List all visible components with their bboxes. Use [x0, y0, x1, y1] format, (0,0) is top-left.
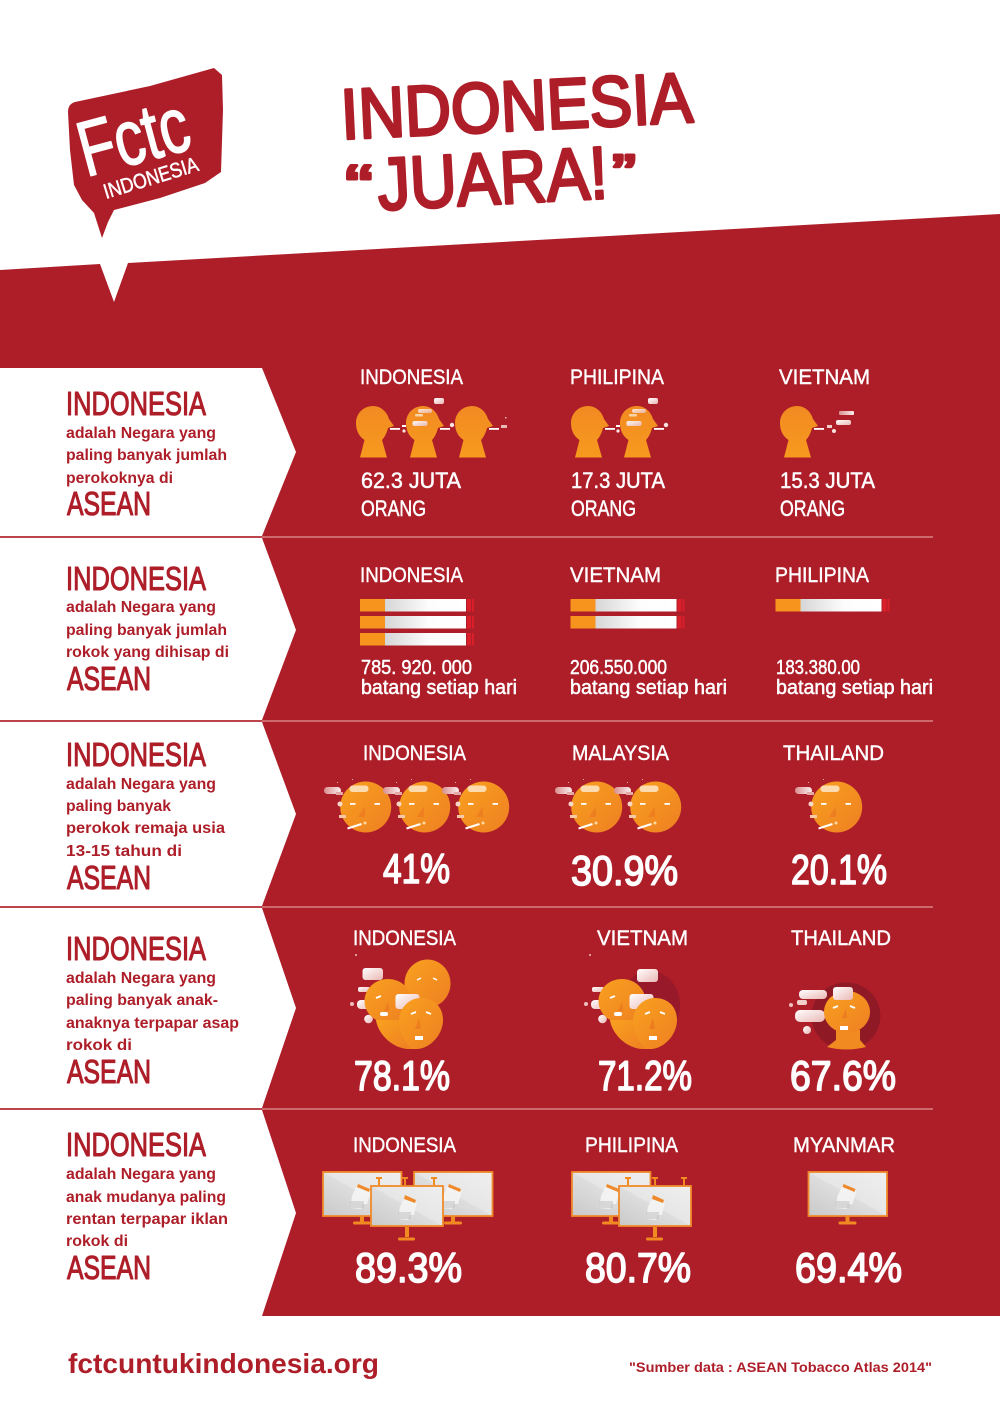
stat: Thailand teen smokers: 20.1% — [791, 846, 887, 893]
stat: Vietnam 15.3 juta: ORANG — [780, 496, 845, 521]
footer: data source: "Sumber data : ASEAN Tobacco Atlas 2014" — [629, 1359, 932, 1375]
heading: Indonesia: INDONESIA — [66, 736, 206, 773]
heading: ASEAN: ASEAN — [67, 660, 151, 697]
stat: Philipina ads: 80.7% — [585, 1244, 691, 1291]
stat: Vietnam cigarettes: batang setiap hari — [570, 677, 727, 699]
stat: Malaysia teen smokers — [555, 742, 681, 894]
text block: description: perokoknya di — [66, 470, 173, 487]
icon: two cigarettes — [570, 599, 684, 628]
stat: Indonesia teen smokers — [324, 742, 509, 892]
text block: description — [66, 599, 229, 661]
text block: description: 13-15 tahun di — [66, 843, 182, 860]
title: “ — [345, 153, 373, 220]
text block: description: adalah Negara yang — [66, 425, 216, 442]
red background band — [0, 214, 1000, 1316]
text block: description — [66, 1166, 228, 1250]
title: ” — [612, 145, 636, 203]
stat: Indonesia ads: 89.3% — [355, 1244, 462, 1291]
icon: one billboard — [808, 1172, 887, 1224]
stat: Indonesia 62.3 juta — [356, 366, 507, 521]
text block: description: adalah Negara yang — [66, 1166, 216, 1183]
stat: Indonesia children — [350, 927, 456, 1099]
stat: Myanmar ads: 69.4% — [795, 1244, 902, 1291]
stat: Indonesia 62.3 juta: 62.3 JUTA — [361, 468, 461, 493]
stat: Malaysia teen smokers: MALAYSIA — [572, 742, 669, 765]
text block: description: rokok di — [66, 1037, 132, 1054]
text block: description: rentan terpapar iklan — [66, 1211, 228, 1228]
icon: three children heads with smoke — [350, 954, 450, 1049]
stat: Indonesia ads: INDONESIA — [353, 1134, 456, 1157]
panel: smokers count — [0, 368, 296, 536]
icon: one smoking head — [780, 406, 854, 458]
stat: Indonesia cigarettes: 785. 920. 000 — [361, 657, 472, 679]
icon: one cigarette — [776, 599, 890, 612]
heading: ASEAN: ASEAN — [67, 859, 151, 896]
panel: youth exposed to ads — [0, 1110, 296, 1316]
text block: description — [66, 776, 225, 860]
stat: Thailand teen smokers: THAILAND — [783, 742, 884, 765]
icon: three smoking heads — [356, 398, 507, 458]
stat: Thailand children — [789, 927, 896, 1099]
icon: two teen faces — [555, 779, 681, 832]
text block: description: paling banyak anak- — [66, 992, 218, 1009]
panel: children exposed to smoke — [0, 908, 296, 1108]
stat: Indonesia ads — [323, 1134, 492, 1291]
text block: description: rokok yang dihisap di — [66, 644, 229, 661]
stat: Philipina 17.3 juta: ORANG — [571, 496, 636, 521]
stat: Philipina ads — [572, 1134, 691, 1291]
text block: description: paling banyak jumlah — [66, 447, 227, 464]
heading: ASEAN: ASEAN — [67, 1249, 151, 1286]
stat: Indonesia 62.3 juta: ORANG — [361, 496, 426, 521]
stat: Indonesia teen smokers: 41% — [383, 845, 450, 892]
text block: description: adalah Negara yang — [66, 970, 216, 987]
icon: three cigarettes — [360, 599, 474, 646]
stat: Vietnam children: 71.2% — [598, 1052, 692, 1099]
stat: Vietnam cigarettes — [570, 564, 727, 699]
stat: Vietnam 15.3 juta: VIETNAM — [779, 366, 870, 389]
heading: Indonesia: INDONESIA — [66, 560, 206, 597]
icon: two smoking heads — [571, 398, 668, 458]
logo: FCTC Indonesia speech bubble: INDONESIA — [101, 153, 201, 204]
stat: Thailand children: THAILAND — [791, 927, 891, 950]
stat: Vietnam 15.3 juta: 15.3 JUTA — [780, 468, 875, 493]
title — [339, 59, 695, 226]
logo: FCTC Indonesia speech bubble: Fctc — [68, 79, 199, 193]
stat: Vietnam children: VIETNAM — [597, 927, 688, 950]
footer: website: fctcuntukindonesia.org — [68, 1348, 379, 1379]
heading: Indonesia: INDONESIA — [66, 1126, 206, 1163]
icon: one child head with smoke — [789, 982, 880, 1050]
stat: Indonesia teen smokers: INDONESIA — [363, 742, 466, 765]
stat: Indonesia children: INDONESIA — [353, 927, 456, 950]
text block: description — [66, 425, 227, 487]
stat: Myanmar ads: MYANMAR — [793, 1134, 895, 1157]
icon: one teen face — [795, 779, 862, 832]
stat: Indonesia cigarettes — [360, 564, 517, 699]
panel: teen smokers — [0, 722, 296, 906]
text block: description — [66, 970, 239, 1054]
stat: Philipina cigarettes — [775, 564, 933, 699]
icon: two billboards — [572, 1172, 691, 1240]
title: INDONESIA — [339, 59, 695, 155]
text block: description: adalah Negara yang — [66, 599, 216, 616]
text block: description: anaknya terpapar asap — [66, 1015, 239, 1032]
icon: two children heads with smoke — [584, 954, 680, 1049]
title: JUARA! — [375, 131, 610, 226]
stat: Malaysia teen smokers: 30.9% — [571, 847, 678, 894]
stat: Philipina 17.3 juta — [570, 366, 668, 521]
heading: Indonesia: INDONESIA — [66, 385, 206, 422]
text block: description: perokok remaja usia — [66, 820, 225, 837]
stat: Thailand children: 67.6% — [790, 1052, 896, 1099]
stat: Myanmar ads — [793, 1134, 902, 1291]
icon: three teen faces — [324, 779, 509, 832]
stat: Indonesia 62.3 juta: INDONESIA — [360, 366, 463, 389]
heading: ASEAN: ASEAN — [67, 485, 151, 522]
stat: Indonesia cigarettes: batang setiap hari — [361, 677, 517, 699]
stat: Vietnam cigarettes: VIETNAM — [570, 564, 661, 587]
stat: Indonesia cigarettes: INDONESIA — [360, 564, 463, 587]
heading: ASEAN: ASEAN — [67, 1053, 151, 1090]
logo: FCTC Indonesia speech bubble — [68, 68, 223, 238]
text block: description: adalah Negara yang — [66, 776, 216, 793]
stat: Philipina 17.3 juta: PHILIPINA — [570, 366, 664, 389]
stat: Philipina cigarettes: batang setiap hari — [776, 677, 933, 699]
text block: description: anak mudanya paling — [66, 1189, 226, 1206]
stat: Vietnam children — [584, 927, 692, 1099]
stat: Thailand teen smokers — [783, 742, 887, 893]
stat: Philipina cigarettes: 183.380.00 — [776, 657, 860, 679]
stat: Philipina ads: PHILIPINA — [585, 1134, 678, 1157]
text block: description: paling banyak jumlah — [66, 622, 227, 639]
stat: Indonesia children: 78.1% — [354, 1052, 450, 1099]
icon: three billboards — [323, 1172, 492, 1240]
text block: description: paling banyak — [66, 798, 171, 815]
heading: Indonesia: INDONESIA — [66, 930, 206, 967]
panel: cigarettes smoked — [0, 538, 296, 720]
stat: Philipina cigarettes: PHILIPINA — [775, 564, 869, 587]
stat: Vietnam cigarettes: 206.550.000 — [570, 657, 667, 679]
stat: Philipina 17.3 juta: 17.3 JUTA — [571, 468, 665, 493]
stat: Vietnam 15.3 juta — [779, 366, 875, 521]
text block: description: rokok di — [66, 1233, 128, 1250]
